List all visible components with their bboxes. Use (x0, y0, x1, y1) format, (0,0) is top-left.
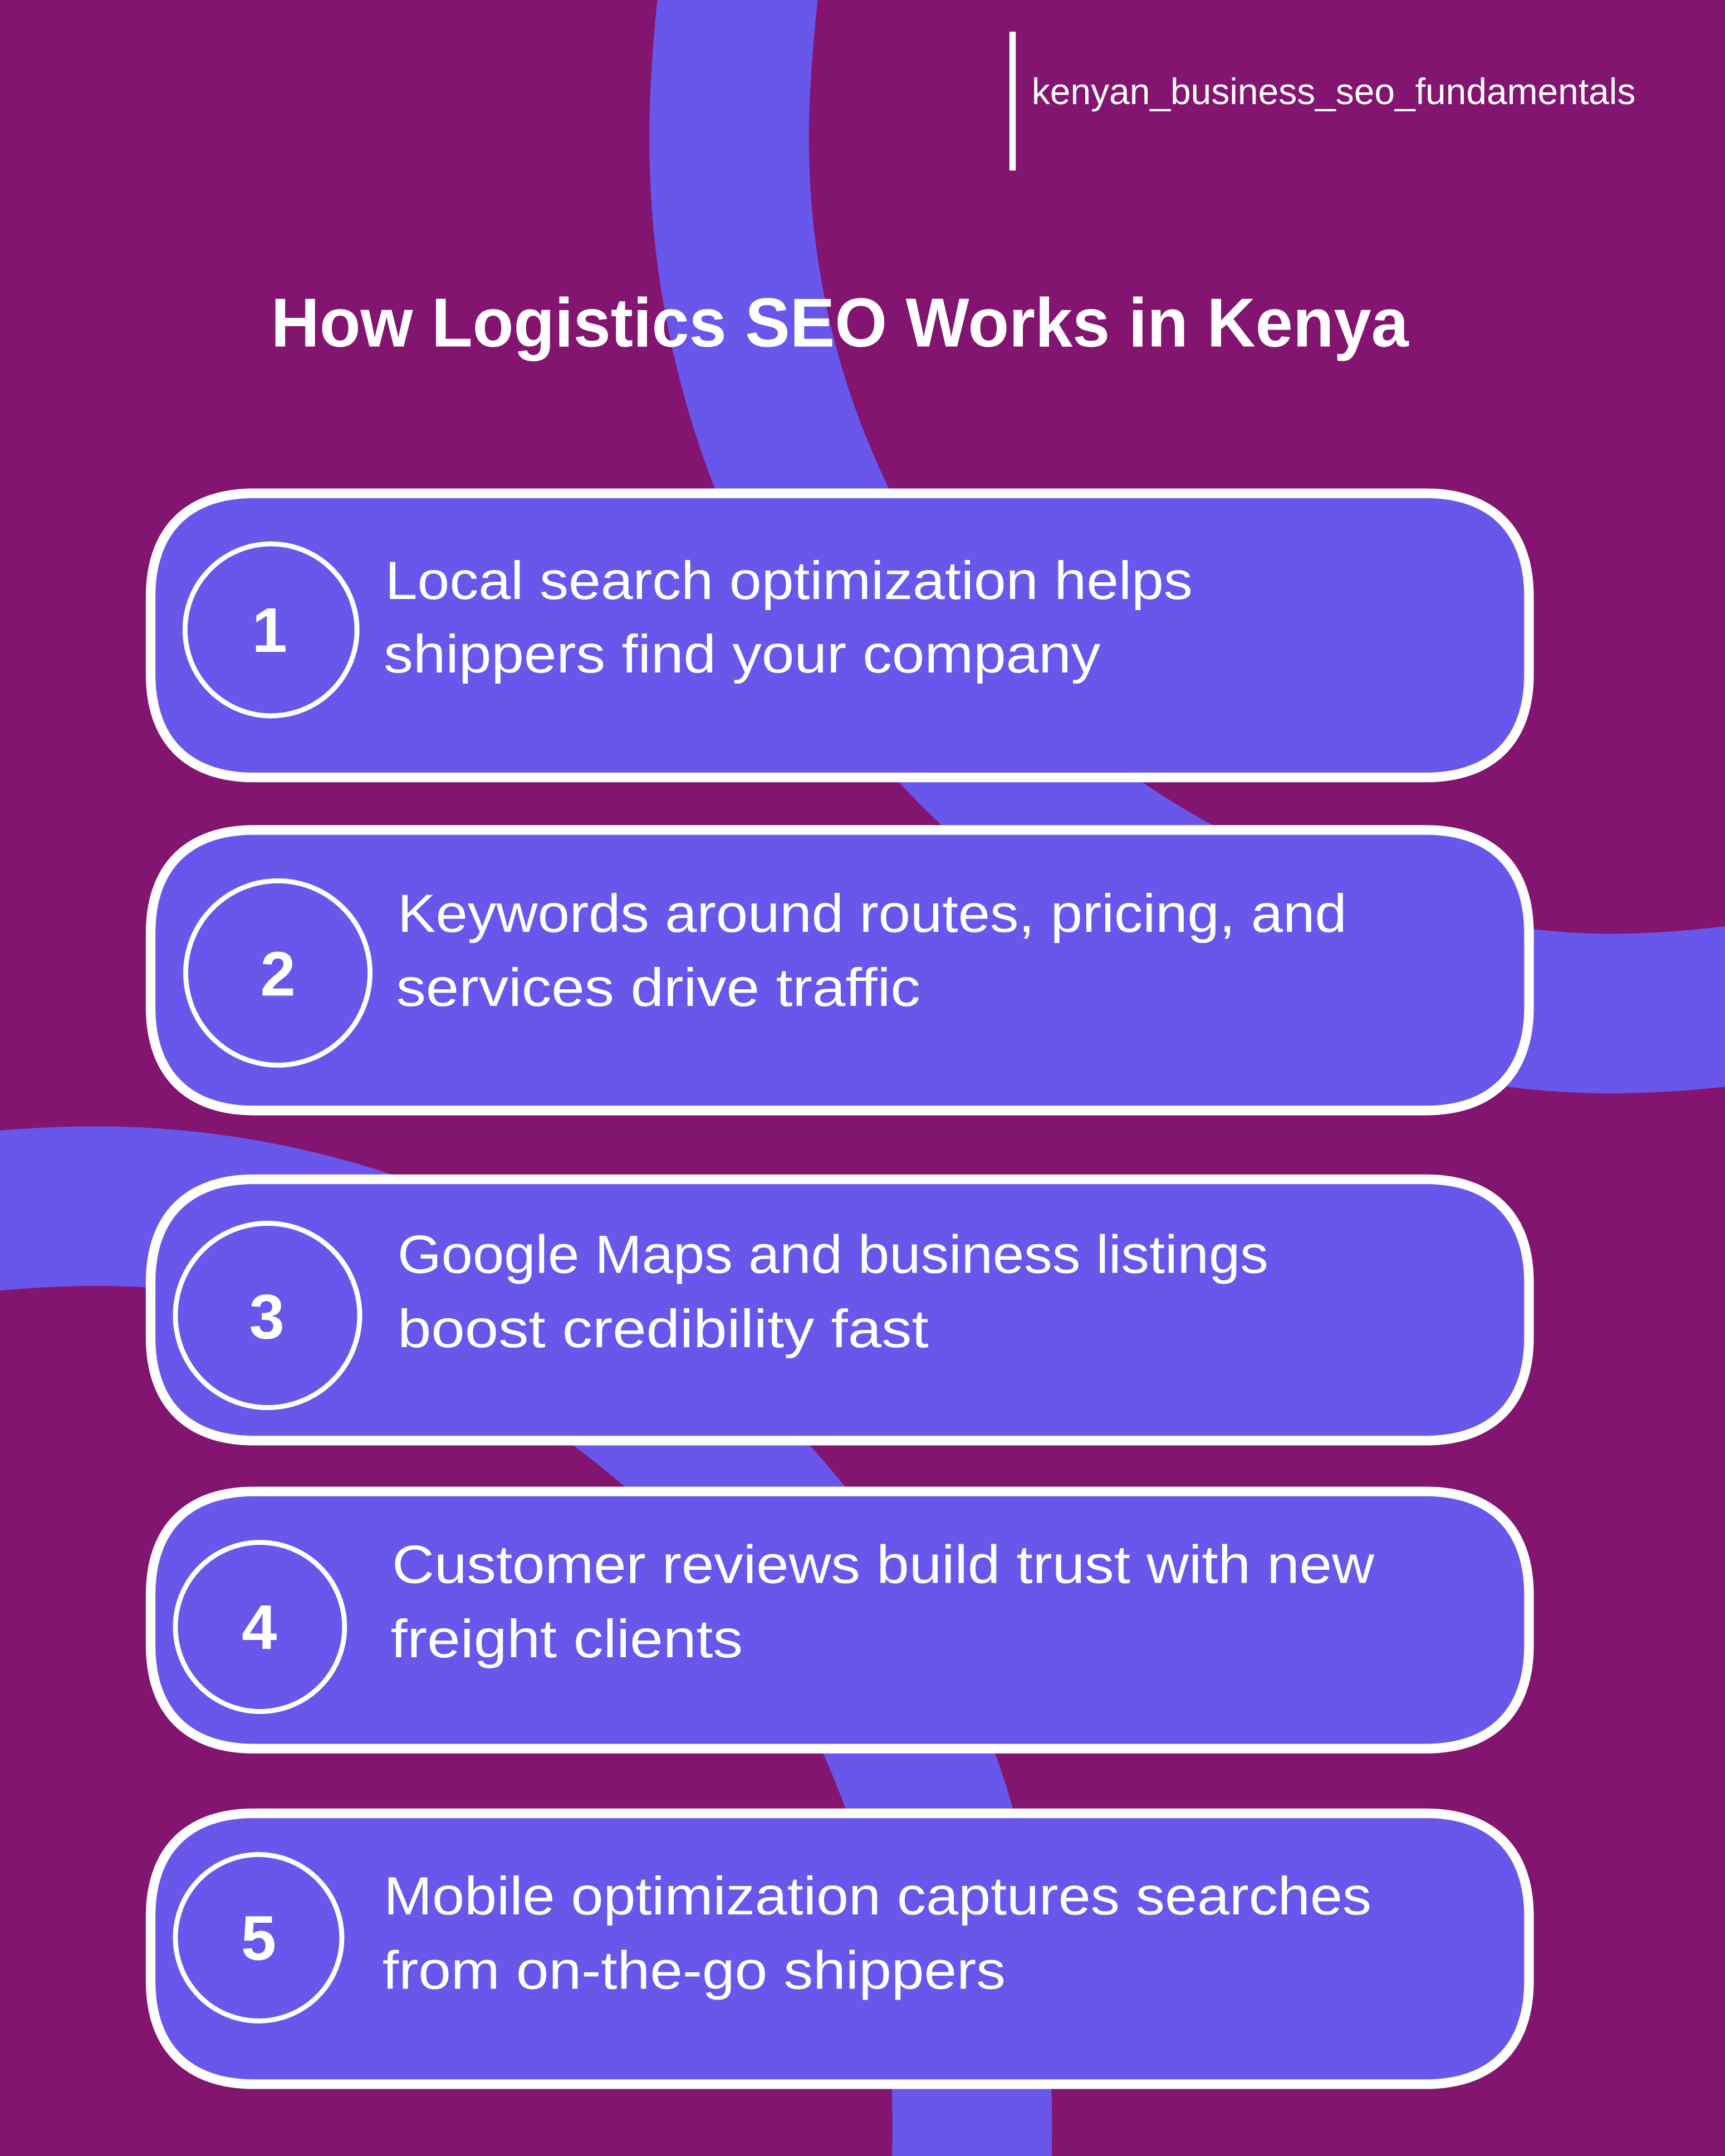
step text: shippers find your company (384, 625, 1100, 684)
number circle (175, 1224, 360, 1408)
number circle (186, 881, 370, 1065)
step text (383, 1867, 1371, 2000)
step number: 4 (242, 1592, 277, 1663)
step text: Keywords around routes, pricing, and (398, 884, 1347, 944)
card background (151, 493, 1529, 778)
panel: step 1 (151, 493, 1529, 778)
card background (151, 1813, 1529, 2084)
card background (151, 830, 1529, 1111)
step text: Customer reviews build trust with new (392, 1535, 1374, 1595)
step text: Local search optimization helps (385, 551, 1193, 611)
number circle (175, 1854, 342, 2021)
panel: step 2 (151, 830, 1529, 1111)
panel: step 5 (151, 1813, 1529, 2084)
card background (151, 1491, 1529, 1749)
step text (391, 1535, 1374, 1669)
step number: 3 (249, 1281, 285, 1352)
decorative ribbon: upper (729, 0, 1725, 1014)
step text (396, 884, 1347, 1018)
step number: 5 (241, 1903, 276, 1973)
step text: Mobile optimization captures searches (384, 1867, 1371, 1926)
number circle (175, 1543, 345, 1712)
step text (398, 1225, 1268, 1359)
panel: step 3 (151, 1179, 1529, 1441)
step number: 2 (260, 939, 296, 1010)
panel: step 4 (151, 1491, 1529, 1749)
card background (151, 1179, 1529, 1441)
title: How Logistics SEO Works in Kenya (271, 284, 1409, 362)
step text: boost credibility fast (398, 1299, 929, 1359)
handle text: kenyan_business_seo_fundamentals (1032, 71, 1635, 112)
decorative ribbon: lower (0, 1206, 972, 2156)
step text: freight clients (391, 1609, 743, 1669)
step text: from on-the-go shippers (383, 1941, 1006, 2000)
step text (384, 551, 1193, 684)
step text: services drive traffic (396, 958, 920, 1018)
step number: 1 (252, 595, 287, 666)
handle divider (1009, 32, 1016, 170)
step text: Google Maps and business listings (398, 1225, 1268, 1284)
number circle (185, 544, 357, 716)
